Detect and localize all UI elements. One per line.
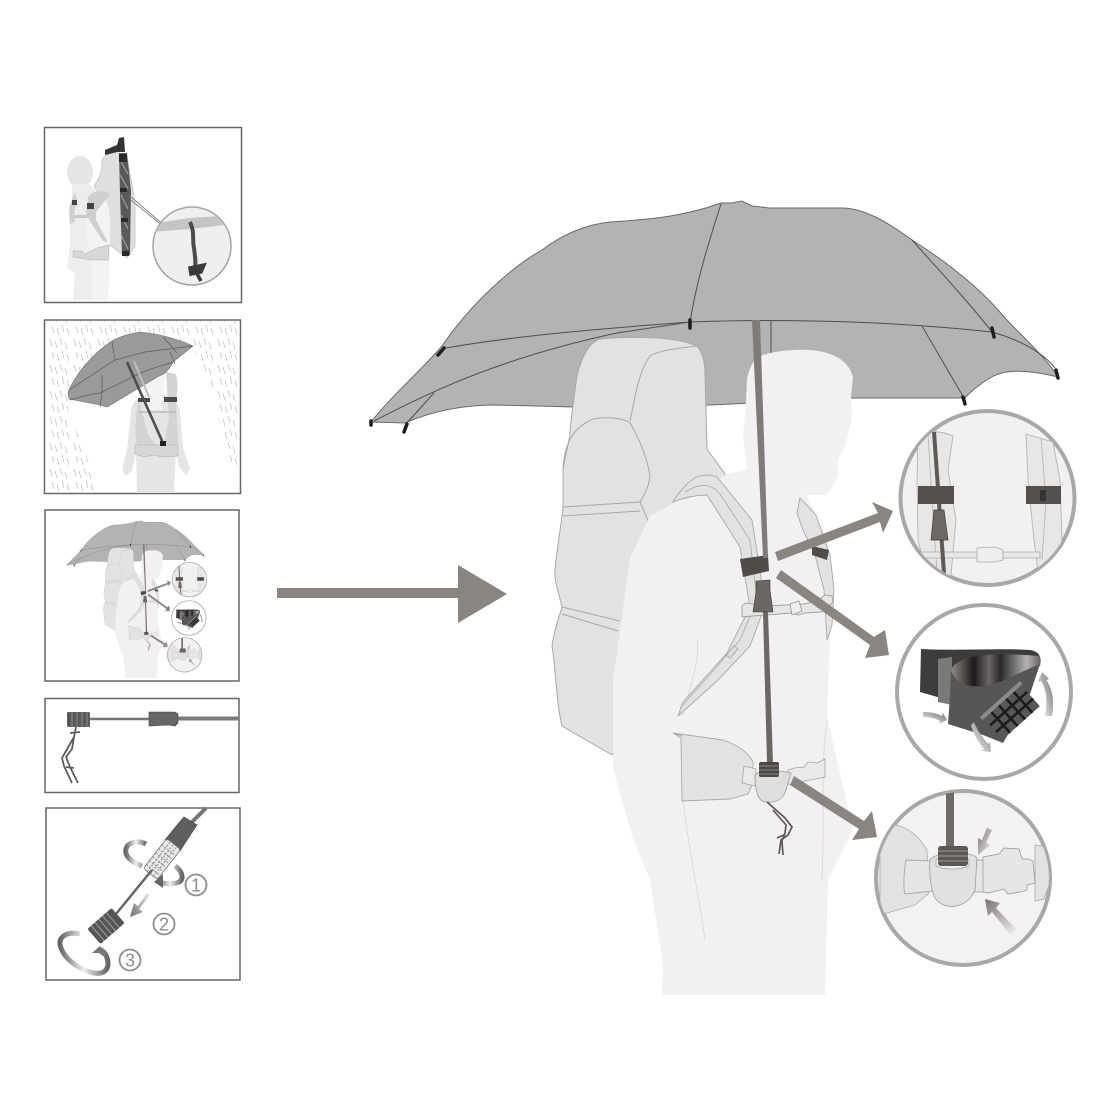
- step 2: 2: [159, 914, 169, 934]
- upper tube: [192, 808, 206, 822]
- shoulder straps: [69, 191, 110, 242]
- chest strap: [73, 215, 88, 218]
- panel 4: handle and cord: [45, 698, 239, 792]
- big arrow: [277, 565, 507, 623]
- straps and pack: [135, 372, 178, 457]
- hip clip and buckle: [742, 759, 825, 802]
- arrow to circle 1: [775, 502, 893, 561]
- shoulder strap near: [673, 475, 763, 716]
- rotation arrow around knob: [60, 933, 108, 973]
- hand and arm lines: [682, 640, 827, 940]
- detail circle: chest strap: [900, 411, 1074, 586]
- person silhouette: [613, 350, 853, 995]
- rotation arrow around sleeve, behind: [126, 842, 146, 866]
- shaft: [88, 718, 150, 720]
- handle clip: [160, 441, 166, 446]
- thick tube: [178, 716, 239, 720]
- panel: carrying on backpack: [44, 128, 242, 302]
- ribbed knob: [67, 712, 90, 727]
- main illustration: [371, 201, 1074, 995]
- detail circle: hip clip: [876, 790, 1052, 965]
- strap band near: [740, 555, 769, 577]
- shoulder strap far: [797, 498, 834, 640]
- step 2: [154, 914, 174, 934]
- thin rod: [116, 870, 152, 914]
- strap bands: [72, 200, 94, 209]
- canopy rib tips: [371, 320, 1058, 432]
- rain: [46, 321, 239, 491]
- hip belt: [73, 245, 109, 260]
- shaft: [752, 320, 768, 558]
- shaft lower: [763, 612, 773, 763]
- back of band: [920, 649, 1041, 700]
- arrowhead: [92, 946, 106, 958]
- step 1: [186, 874, 206, 896]
- strap band far: [812, 546, 829, 560]
- infographic canvas: [44, 126, 1076, 995]
- chest strap and buckle: [742, 595, 833, 617]
- front of band: [948, 664, 1040, 743]
- arrow to circle 2: [776, 570, 889, 658]
- ribbed knob: [759, 762, 779, 777]
- inner shine: [952, 654, 1040, 688]
- canopy: [371, 201, 1058, 432]
- grip: [753, 580, 773, 612]
- cord: [62, 727, 80, 783]
- press arrows: [978, 828, 992, 855]
- velcro patch: [938, 657, 952, 705]
- person from behind: [122, 362, 190, 493]
- step 1: 1: [191, 876, 201, 896]
- cord: [767, 802, 792, 855]
- threaded knob: [87, 908, 125, 944]
- panel 5: assembly steps: [46, 808, 240, 980]
- step 3: 3: [125, 950, 135, 970]
- hip pad: [673, 733, 753, 801]
- detail circle: cord knot: [150, 207, 235, 285]
- pointer lines: [130, 196, 165, 227]
- step 3: [120, 950, 140, 970]
- panel: in the rain: [44, 320, 240, 494]
- head highlight: [144, 362, 165, 410]
- knurled sleeve: [143, 838, 181, 880]
- clip teeth: [980, 681, 1041, 741]
- rotation arrow around sleeve, front: [158, 866, 182, 884]
- rotate arrows: [1038, 672, 1053, 716]
- hip pad fold: [673, 733, 682, 736]
- slide down arrow: [130, 893, 150, 917]
- closer arm: [86, 194, 110, 300]
- shaft and shaft shadow: [127, 362, 163, 443]
- backpack: [94, 153, 135, 258]
- grip: [149, 712, 178, 726]
- grip: [165, 817, 197, 851]
- person silhouette, side: [67, 156, 110, 300]
- sleeve arrowhead: [154, 874, 163, 888]
- closed umbrella: [105, 137, 131, 256]
- panel: overview of the system: [45, 510, 239, 681]
- arrow to circle 3: [790, 776, 877, 840]
- umbrella tilted: [68, 332, 193, 407]
- detail circle: strap clip: [897, 605, 1071, 779]
- backpack: [552, 337, 725, 755]
- overview thumbnail in panel 3: [67, 521, 207, 678]
